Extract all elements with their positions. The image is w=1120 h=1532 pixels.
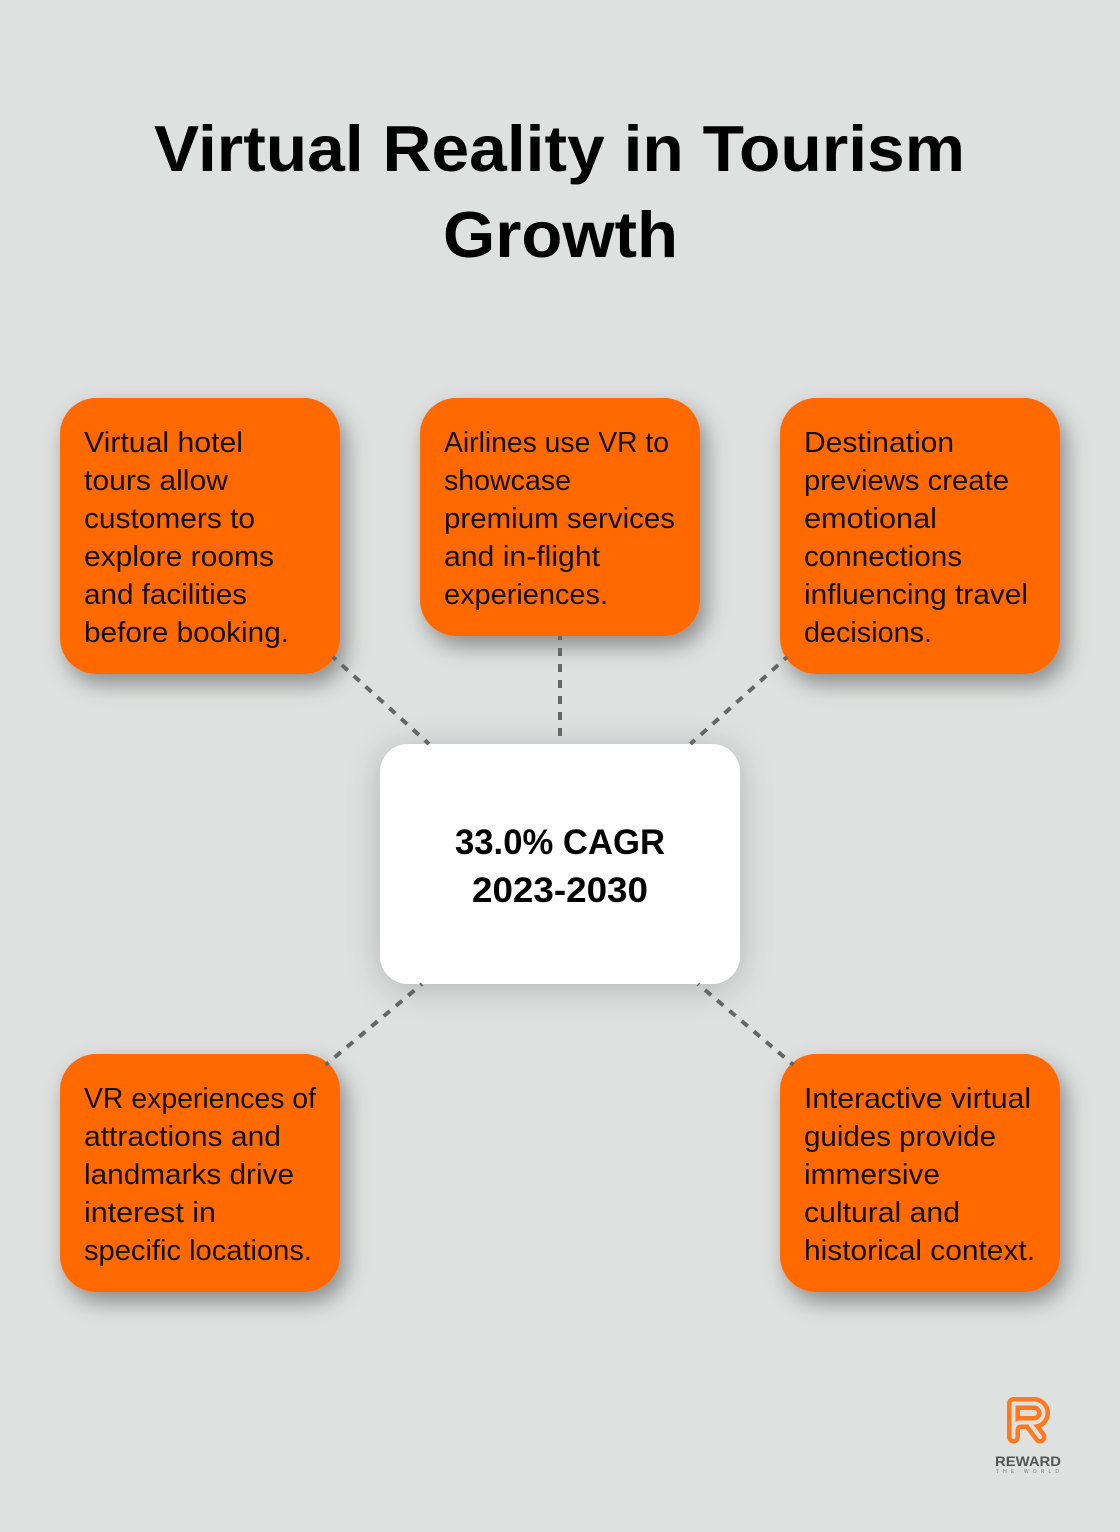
panel: airlines: Airlines use VR to [444, 427, 669, 459]
panel: airlines: and in-flight [444, 541, 600, 573]
panel: destination previews: Destination [804, 427, 954, 459]
title: Growth [443, 198, 678, 271]
panel: VR attractions: interest in [84, 1197, 216, 1229]
title [154, 112, 965, 271]
panel: destination previews: previews create [804, 465, 1009, 497]
panel: interactive guides: historical context. [804, 1235, 1035, 1267]
logo: Reward the World [995, 1404, 1061, 1475]
icon: R mark [1014, 1404, 1044, 1437]
panel: center statistic: 2023-2030 [472, 871, 648, 910]
panel: VR attractions [60, 1054, 340, 1292]
panel: center statistic [380, 744, 740, 984]
panel: VR attractions: VR experiences of [84, 1083, 317, 1115]
panel: destination previews: emotional [804, 503, 937, 535]
panel: virtual hotel tours: customers to [84, 503, 255, 535]
panel: VR attractions: specific locations. [84, 1235, 312, 1267]
panel: destination previews: influencing travel [804, 579, 1028, 611]
panel: virtual hotel tours: Virtual hotel [84, 427, 243, 459]
panel: airlines: showcase [444, 465, 571, 497]
panel: virtual hotel tours: tours allow [84, 465, 229, 497]
panel: airlines [420, 398, 700, 636]
panel: destination previews [780, 398, 1060, 674]
logo: Reward the World: REWARD [995, 1453, 1061, 1469]
panel: virtual hotel tours [60, 398, 340, 674]
panel: interactive guides: Interactive virtual [804, 1083, 1031, 1115]
panel: interactive guides: immersive [804, 1159, 940, 1191]
logo: Reward the World: THE WORLD [996, 1469, 1059, 1475]
panel: virtual hotel tours: and facilities [84, 579, 247, 611]
panel: virtual hotel tours: before booking. [84, 617, 289, 649]
panel: virtual hotel tours: explore rooms [84, 541, 274, 573]
panel: interactive guides: cultural and [804, 1197, 960, 1229]
panel: VR attractions: attractions and [84, 1121, 281, 1153]
title: Virtual Reality in Tourism [154, 112, 965, 185]
panel: destination previews: connections [804, 541, 962, 573]
panel: VR attractions: landmarks drive [84, 1159, 294, 1191]
panel: interactive guides [780, 1054, 1060, 1292]
panel: airlines: experiences. [444, 579, 608, 611]
panel: center statistic: 33.0% CAGR [455, 823, 665, 862]
panel: interactive guides: guides provide [804, 1121, 996, 1153]
connector lines [326, 636, 794, 1065]
panel: airlines: premium services [444, 503, 675, 535]
panel: destination previews: decisions. [804, 617, 932, 649]
